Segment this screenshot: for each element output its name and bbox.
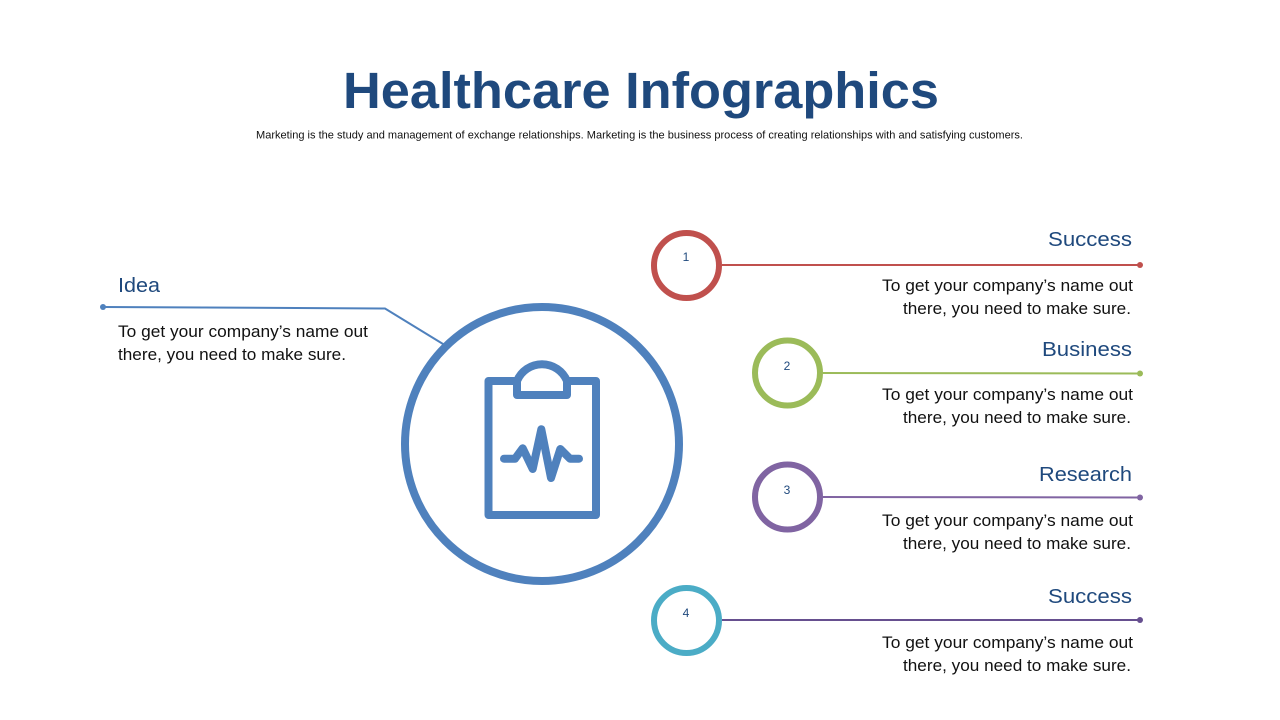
- text 1: [882, 276, 1133, 318]
- ring 4: [654, 588, 719, 653]
- text 1: To get your company’s name out: [882, 276, 1133, 295]
- idea text: [118, 322, 368, 364]
- number 4: 4: [683, 606, 690, 620]
- heading 2: Business: [1042, 339, 1132, 361]
- idea heading: Idea: [118, 275, 161, 297]
- text 2: To get your company’s name out: [882, 385, 1133, 404]
- number 3: 3: [784, 483, 791, 497]
- number 1: 1: [683, 250, 690, 264]
- idea connector line: [100, 304, 443, 344]
- line 3: [823, 494, 1143, 500]
- ring 2: [755, 340, 820, 406]
- idea text: there, you need to make sure.: [118, 345, 346, 364]
- line 4: [722, 617, 1143, 623]
- panel: item 3: [755, 464, 1143, 553]
- ring 1: [654, 233, 719, 298]
- line 2: [823, 370, 1143, 376]
- title: Healthcare Infographics: [343, 62, 939, 119]
- heading 1: Success: [1048, 229, 1132, 251]
- text 2: [882, 385, 1133, 427]
- panel: idea: [100, 275, 443, 364]
- text 3: there, you need to make sure.: [903, 534, 1131, 553]
- ring 3: [755, 464, 820, 530]
- subtitle: Marketing is the study and management of exchange relationships. Marketing is the business process of creating relationships with and satisfying customers.: [256, 130, 1023, 142]
- panel: item 2: [755, 339, 1143, 427]
- text 1: there, you need to make sure.: [903, 299, 1131, 318]
- heading 4: Success: [1048, 586, 1132, 608]
- text 4: there, you need to make sure.: [903, 656, 1131, 675]
- text 3: [882, 511, 1133, 553]
- panel: item 4: [654, 586, 1143, 675]
- text 3: To get your company’s name out: [882, 511, 1133, 530]
- text 4: To get your company’s name out: [882, 633, 1133, 652]
- heading 3: Research: [1039, 464, 1132, 486]
- idea text: To get your company’s name out: [118, 322, 368, 341]
- line 1: [722, 262, 1143, 268]
- central circle with icon: [405, 307, 679, 581]
- icon: clipboard with heartbeat: [488, 364, 596, 515]
- large ring: [405, 307, 679, 581]
- text 4: [882, 633, 1133, 675]
- number 2: 2: [784, 359, 791, 373]
- text 2: there, you need to make sure.: [903, 408, 1131, 427]
- panel: item 1: [654, 229, 1143, 318]
